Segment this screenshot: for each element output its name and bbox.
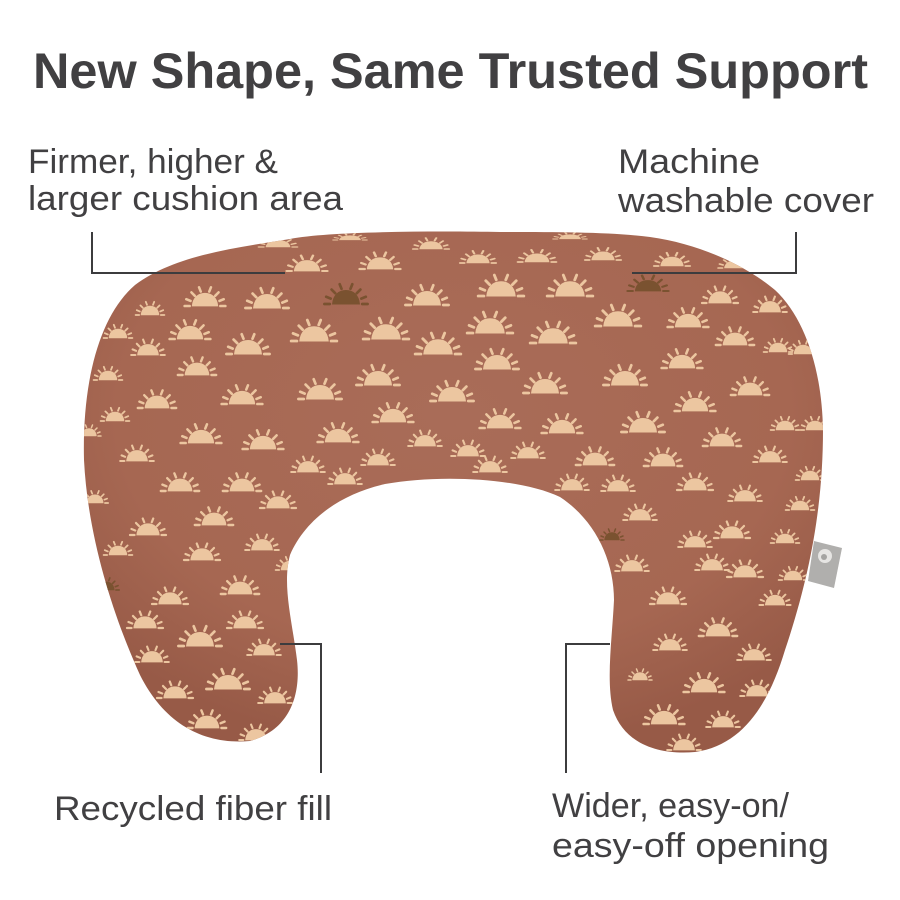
callout: washable cover: washable cover <box>617 182 874 220</box>
sun pattern <box>77 232 829 750</box>
callout: washable cover: Machine <box>618 143 760 181</box>
callout: firmer cushion: larger cushion area <box>28 180 343 218</box>
pillow <box>77 232 829 753</box>
callout: washable cover <box>617 143 874 273</box>
callout: wider opening <box>552 644 829 865</box>
icon: fabric tag <box>808 541 842 588</box>
callout: wider opening: Wider, easy-on/ <box>552 787 790 825</box>
callout: wider opening: easy-off opening <box>552 827 829 865</box>
callout: recycled fill <box>54 644 332 828</box>
dark sun accents <box>93 276 668 590</box>
callout: recycled fill: Recycled fiber fill <box>54 790 332 828</box>
callout: firmer cushion <box>28 143 343 273</box>
callout: firmer cushion: Firmer, higher & <box>28 143 278 181</box>
title: New Shape, Same Trusted Support <box>33 43 868 99</box>
